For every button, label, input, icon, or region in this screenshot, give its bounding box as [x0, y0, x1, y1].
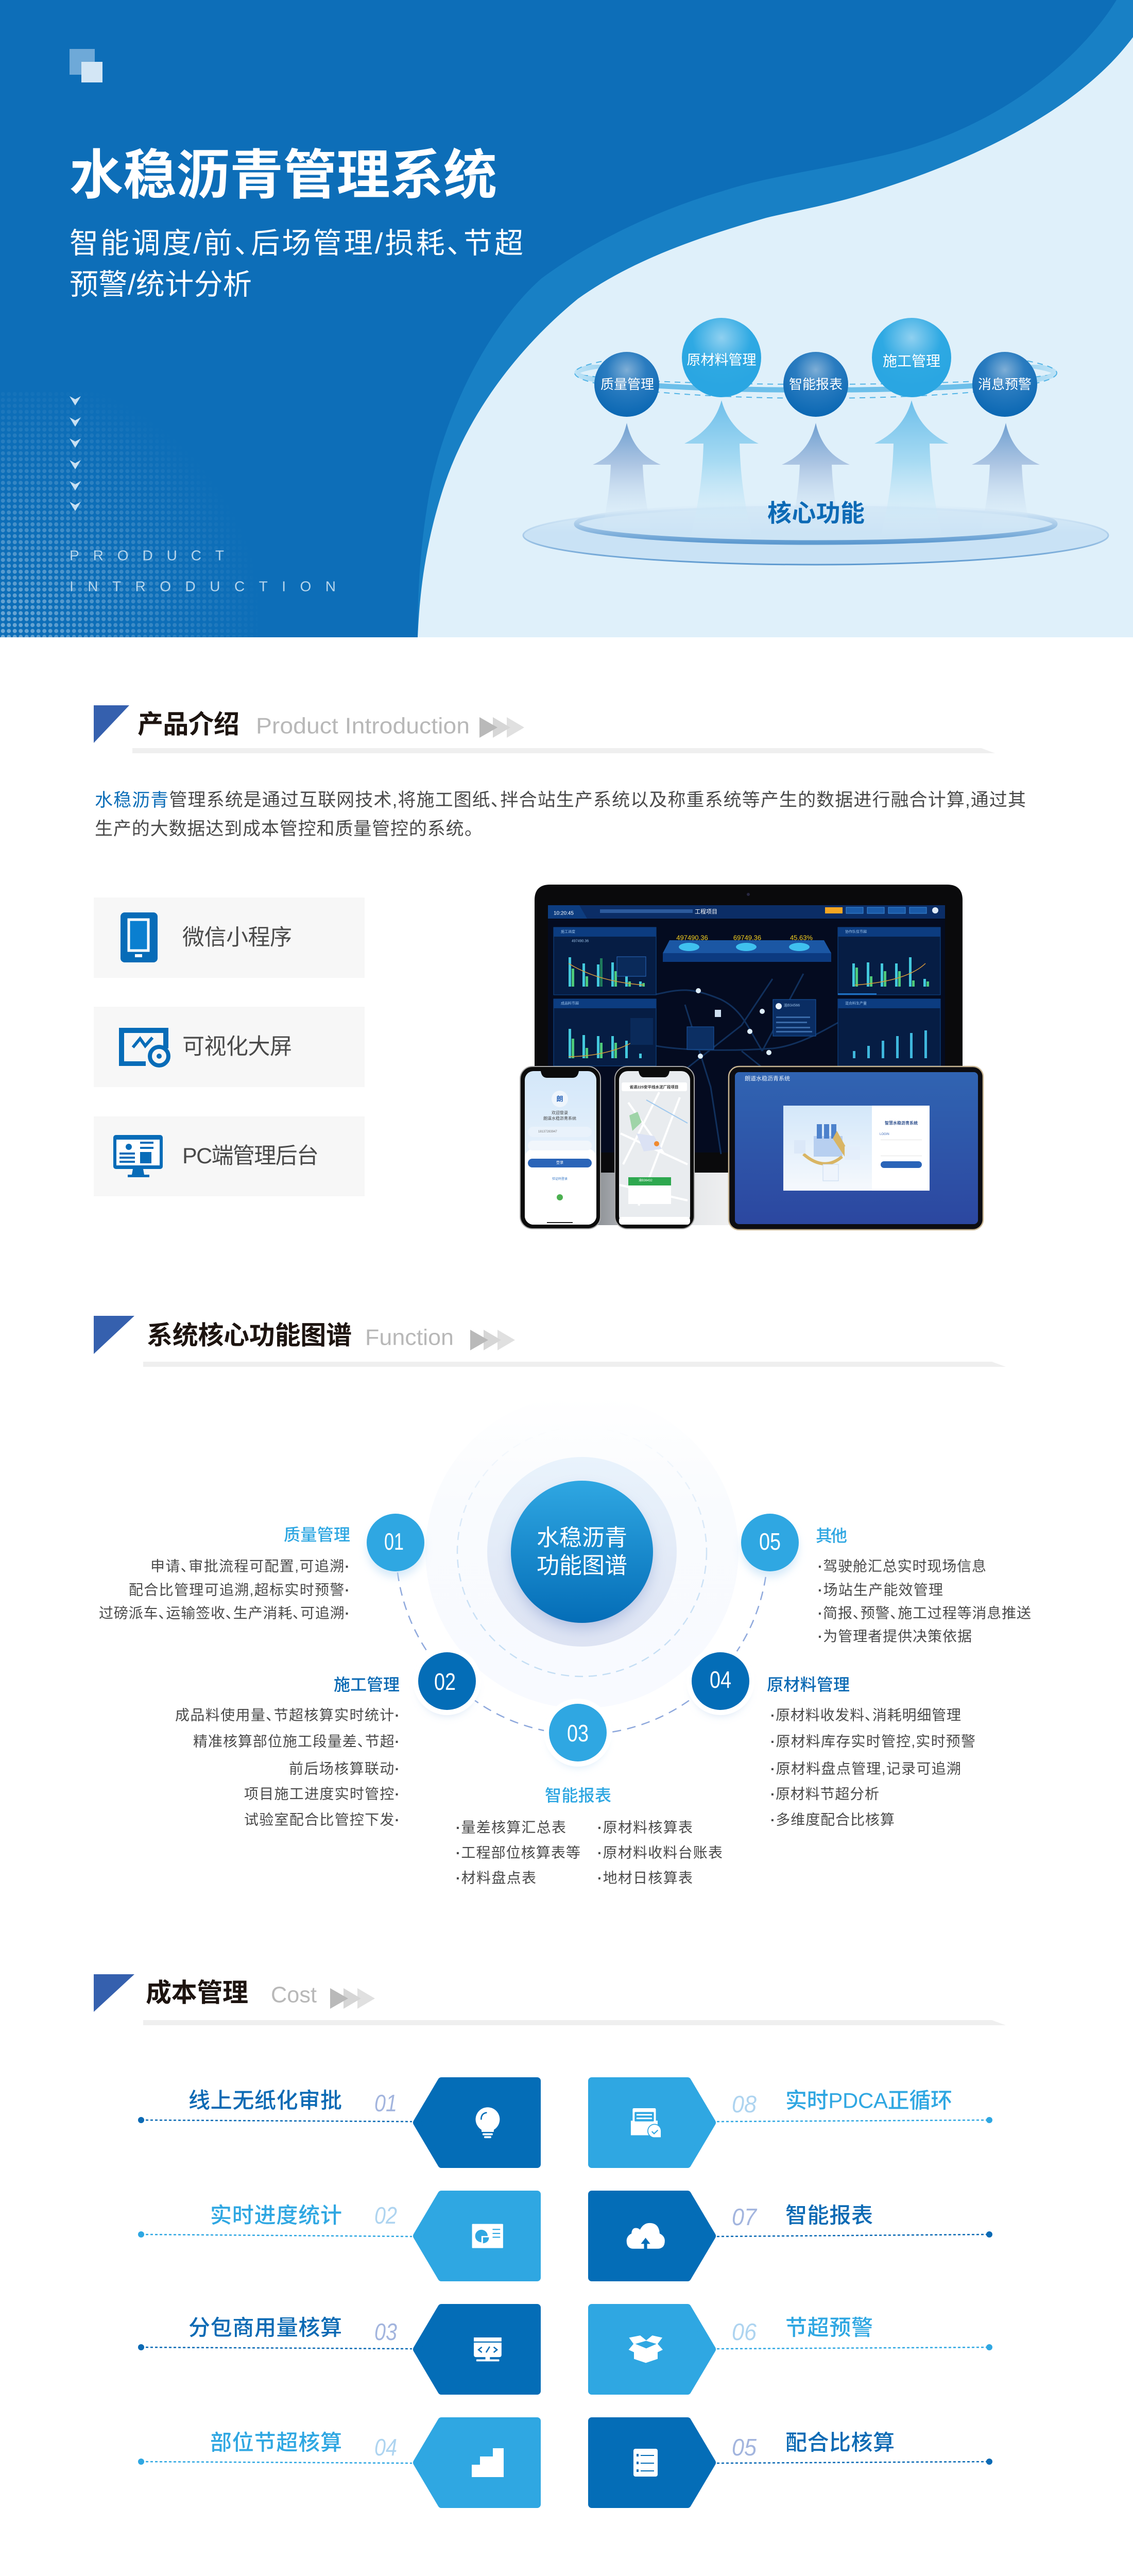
text block: raw material management: ·原材料收发料、消耗明细管理 — [770, 1707, 961, 1723]
sphere: raw material: 原材料管理 — [687, 352, 756, 368]
card: visual big screen — [94, 1007, 365, 1087]
cost item 08 — [592, 2081, 992, 2164]
arrow: report — [782, 423, 850, 531]
cost item 05: 05 — [732, 2434, 757, 2461]
icon: cloud upload — [627, 2223, 665, 2249]
icon: open box — [629, 2335, 663, 2363]
sphere: report: 智能报表 — [789, 377, 843, 392]
sphere: raw material — [682, 318, 761, 397]
dashboard top bar: 工程项目 — [695, 908, 717, 915]
section heading: product introduction — [94, 705, 995, 753]
card: visual big screen: 可视化大屏 — [182, 1035, 292, 1059]
cost item 01: 01 — [374, 2090, 397, 2116]
text block: quality management: 过磅派车、运输签收、生产消耗、可追溯· — [99, 1605, 350, 1621]
section heading: function: 系统核心功能图谱 — [147, 1321, 352, 1350]
cost item 05: 配合比核算 — [785, 2431, 895, 2454]
icon: pc — [113, 1135, 163, 1177]
icon: down chevrons — [70, 396, 81, 511]
arrow: construction — [874, 400, 949, 538]
centre circle: 功能图谱 — [537, 1553, 627, 1579]
concentric rings — [425, 1395, 739, 1708]
section heading: cost — [94, 1974, 1006, 2025]
product introduction caption: PRODUCT — [70, 547, 224, 564]
node 05: 05 — [759, 1528, 781, 1555]
cost item 06: 节超预警 — [785, 2315, 873, 2340]
panel: right top: 协作队伍节超 — [845, 929, 867, 934]
connector arc — [398, 1572, 766, 1735]
section heading: product introduction: 产品介绍 — [138, 710, 239, 739]
tablet — [729, 1066, 983, 1230]
sphere: construction — [872, 318, 951, 397]
centre stage: 69749.36 — [733, 934, 761, 942]
sphere: quality — [594, 352, 659, 417]
cost item 08: 实时PDCA正循环 — [785, 2089, 952, 2112]
section heading: function — [94, 1316, 1006, 1367]
arrow: quality — [593, 423, 661, 531]
node 05 — [741, 1514, 799, 1577]
phone: map: 渝B36432 — [639, 1178, 653, 1182]
intro paragraph: 水稳沥青管理系统是通过互联网技术,将施工图纸、拌合站生产系统以及称重系统等产生的数据进行融合计算,通过其 — [95, 790, 1026, 810]
phone: login: 欢迎登录 — [552, 1110, 568, 1115]
text block: construction management: 精准核算部位施工段量差、节超· — [193, 1733, 400, 1750]
node 04 — [686, 1647, 754, 1716]
icon: document check — [631, 2108, 662, 2138]
text block: construction management: 前后场核算联动· — [289, 1761, 400, 1776]
text block: construction management: 成品料使用量、节超核算实时统计· — [175, 1707, 400, 1723]
centre circle: 水稳沥青 — [537, 1525, 627, 1551]
dashboard top bar: 10:20:45 — [554, 911, 574, 916]
card: wechat mini program: 微信小程序 — [182, 925, 292, 950]
orbit rings — [574, 361, 1057, 399]
cost item 04 — [138, 2421, 537, 2504]
text block: other: ·为管理者提供决策依据 — [818, 1628, 972, 1645]
panel: left top: 497490.36 — [572, 940, 589, 943]
arrow: raw material — [684, 400, 759, 538]
node 01: 01 — [384, 1528, 404, 1555]
sphere: alert — [972, 352, 1037, 417]
cost item 07: 07 — [732, 2204, 757, 2230]
text block: other: 其他 — [816, 1527, 847, 1545]
text block: smart reports — [456, 1786, 723, 1886]
cost item 07: 智能报表 — [785, 2203, 873, 2228]
function map diagram — [367, 1395, 799, 1767]
cost item 05 — [592, 2421, 992, 2504]
section heading: cost: 成本管理 — [146, 1978, 248, 2007]
text block: smart reports: 智能报表 — [545, 1786, 611, 1805]
text block: other: ·场站生产能效管理 — [818, 1582, 943, 1598]
text block: construction management: 试验室配合比管控下发· — [244, 1811, 400, 1828]
text block: smart reports: ·原材料收料台账表 — [597, 1844, 723, 1861]
phone: login: 登录 — [556, 1160, 563, 1164]
text block: construction management: 施工管理 — [334, 1675, 400, 1694]
icon: light bulb — [476, 2107, 500, 2138]
core label: 核心功能 — [767, 500, 865, 527]
device mockup — [520, 885, 983, 1230]
node 02 — [413, 1647, 481, 1716]
icon: pie report card — [472, 2224, 503, 2248]
text block: other: ·简报、预警、施工过程等消息推送 — [818, 1605, 1031, 1621]
sphere: quality: 质量管理 — [600, 377, 654, 392]
panel: left top: 施工进度 — [561, 929, 575, 934]
icon: stairs — [472, 2448, 504, 2477]
map popup — [773, 999, 816, 1036]
text block: quality management: 质量管理 — [284, 1526, 350, 1544]
centre circle — [511, 1481, 653, 1628]
login card — [783, 1106, 930, 1191]
phone: login: 18137283947 — [538, 1130, 557, 1133]
icon: big screen — [119, 1028, 168, 1066]
logo squares — [70, 49, 102, 82]
cost item 03 — [138, 2308, 537, 2391]
phone: login: 验证码登录 — [552, 1177, 568, 1181]
text block: smart reports: ·材料盘点表 — [456, 1870, 536, 1886]
login card: LOGIN — [880, 1133, 889, 1136]
cost item 04: 04 — [374, 2434, 397, 2461]
cost item 03: 03 — [374, 2318, 397, 2345]
centre stage — [663, 934, 831, 962]
panel: right bottom: 混合料生产量 — [845, 1001, 867, 1006]
hero subtitle: 预警/统计分析 — [70, 268, 252, 301]
panel: left top — [554, 927, 656, 995]
card: wechat mini program — [94, 897, 365, 978]
icon: code monitor — [474, 2337, 502, 2361]
panel: left bottom: 成品料节超 — [561, 1001, 579, 1006]
intro paragraph — [95, 790, 1026, 839]
cost item 02 — [138, 2194, 537, 2278]
map roads — [656, 974, 845, 1154]
text block: quality management: 配合比管理可追溯,超标实时预警· — [129, 1582, 350, 1598]
text block: other: ·驾驶舱汇总实时现场信息 — [818, 1558, 986, 1574]
node 03 — [544, 1699, 612, 1767]
text block: raw material management: ·多维度配合比核算 — [770, 1811, 895, 1828]
phone: map — [615, 1066, 694, 1229]
centre stage: 45.63% — [790, 934, 813, 942]
text block: other — [816, 1527, 1031, 1645]
phone: map: 省道225安平线水泥厂段项目 — [629, 1084, 679, 1089]
text block: smart reports: ·地材日核算表 — [597, 1870, 693, 1886]
phone: login: 朗 — [556, 1095, 563, 1103]
phone: login — [520, 1066, 600, 1229]
text block: construction management — [175, 1675, 400, 1828]
centre stage: 497490.36 — [676, 934, 708, 942]
cost item 07 — [592, 2194, 992, 2278]
section heading: function: Function — [365, 1325, 454, 1350]
cost item 01 — [138, 2081, 537, 2164]
text block: raw material management: ·原材料节超分析 — [770, 1786, 879, 1802]
dashboard top bar — [548, 905, 945, 919]
text block: raw material management: ·原材料库存实时管控,实时预警 — [770, 1733, 975, 1750]
cost item 06 — [592, 2308, 992, 2391]
text block: quality management — [99, 1526, 350, 1621]
hero subtitle: 智能调度/前、后场管理/损耗、节超 — [70, 227, 523, 260]
hero subtitle — [70, 227, 523, 301]
sphere: report — [783, 352, 848, 417]
cost item 04: 部位节超核算 — [210, 2431, 342, 2454]
panel: left bottom — [554, 999, 656, 1066]
cost item 01: 线上无纸化审批 — [188, 2089, 342, 2112]
cost item 08: 08 — [732, 2091, 757, 2117]
monitor — [535, 885, 963, 1173]
panel: right bottom — [838, 999, 940, 1066]
text block: smart reports: ·原材料核算表 — [597, 1820, 693, 1835]
panel: right top — [838, 927, 940, 995]
node 01 — [367, 1514, 424, 1577]
platform — [523, 505, 1108, 565]
core function diagram — [523, 318, 1108, 565]
node 02: 02 — [434, 1668, 456, 1695]
text block: smart reports: ·量差核算汇总表 — [456, 1820, 566, 1835]
cost item 02: 实时进度统计 — [210, 2203, 342, 2228]
cost item 03: 分包商用量核算 — [188, 2315, 342, 2340]
cost item 06: 06 — [732, 2318, 757, 2345]
icon: list — [633, 2449, 658, 2477]
sphere: construction: 施工管理 — [883, 353, 940, 369]
product introduction caption: INTRODUCTION — [70, 578, 336, 595]
section heading: product introduction: Product Introduction — [256, 713, 470, 739]
text block: raw material management — [767, 1675, 975, 1828]
text block: raw material management: ·原材料盘点管理,记录可追溯 — [770, 1761, 961, 1776]
hero banner — [0, 0, 1133, 637]
text block: construction management: 项目施工进度实时管控· — [244, 1786, 400, 1802]
map popup: 渝B34566 — [784, 1003, 800, 1008]
icon: phone — [121, 912, 158, 962]
monitor stand — [592, 1170, 735, 1225]
text block: quality management: 申请、审批流程可配置,可追溯· — [150, 1558, 350, 1574]
sphere: alert: 消息预警 — [978, 377, 1032, 392]
card: pc admin — [94, 1116, 365, 1196]
node 03: 03 — [567, 1720, 589, 1747]
map pins — [696, 988, 771, 1059]
cost item 02: 02 — [374, 2202, 397, 2229]
text block: raw material management: 原材料管理 — [767, 1675, 850, 1694]
login card: 智慧水稳沥青系统 — [885, 1120, 918, 1125]
phone: login: 朗道水稳沥青系统 — [543, 1116, 576, 1121]
product introduction caption — [70, 547, 336, 595]
card: pc admin: PC端管理后台 — [182, 1144, 319, 1168]
intro paragraph: 生产的大数据达到成本管控和质量管控的系统。 — [95, 819, 473, 839]
section heading: cost: Cost — [271, 1982, 317, 2007]
text block: smart reports: ·工程部位核算表等 — [456, 1844, 580, 1861]
tablet: 朗道水稳沥青系统 — [745, 1075, 790, 1082]
arrow: alert — [972, 423, 1040, 531]
hero title: 水稳沥青管理系统 — [70, 146, 497, 206]
node 04: 04 — [710, 1666, 731, 1693]
